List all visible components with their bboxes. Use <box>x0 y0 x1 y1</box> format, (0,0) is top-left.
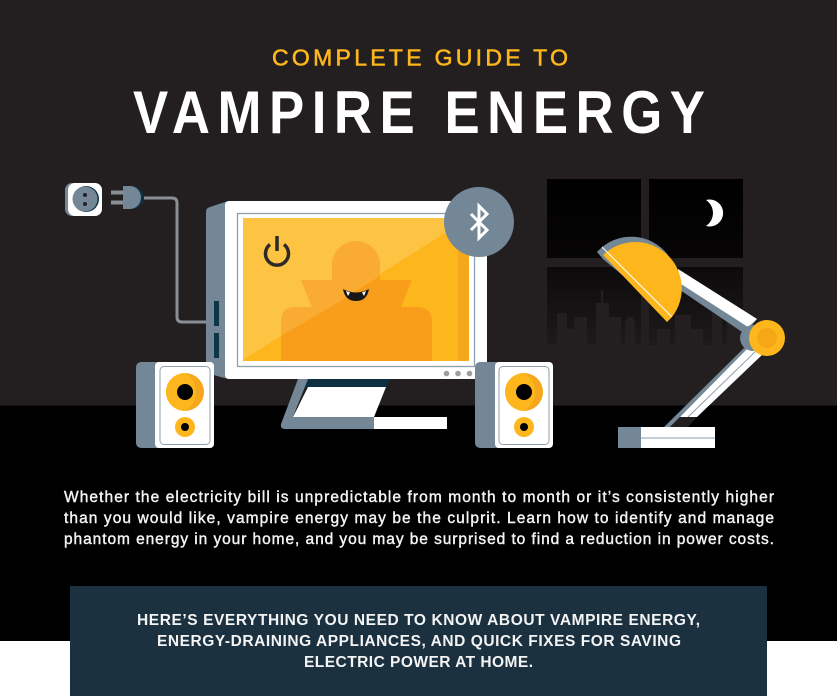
icon: crescent moon <box>706 200 723 226</box>
eyebrow heading: COMPLETE GUIDE TO <box>272 44 568 70</box>
icon: wall outlet <box>65 183 102 216</box>
monitor screen <box>243 218 469 361</box>
monitor side panel <box>206 201 228 379</box>
panel: summary callout <box>70 586 767 696</box>
intro text block: phantom energy in your home, and you may be surprised to find a reduction in power costs. <box>64 531 774 548</box>
desk lamp <box>597 237 785 448</box>
callout text: ENERGY-DRAINING APPLIANCES, AND QUICK FIXES FOR SAVING <box>157 633 681 650</box>
lamp base <box>618 427 715 448</box>
lamp shade <box>597 237 682 322</box>
left speaker <box>136 362 214 448</box>
callout text: ELECTRIC POWER AT HOME. <box>304 654 533 671</box>
callout text: HERE’S EVERYTHING YOU NEED TO KNOW ABOUT VAMPIRE ENERGY, <box>137 612 700 629</box>
monitor bezel <box>225 201 487 379</box>
icon: plug and cable <box>111 186 207 322</box>
callout text <box>137 612 700 671</box>
title <box>133 44 705 146</box>
intro text block: Whether the electricity bill is unpredictable from month to month or it’s consistently higher <box>64 489 774 506</box>
intro text block: than you would like, vampire energy may be the culprit. Learn how to identify and manage <box>64 510 774 527</box>
vampire lit area <box>281 241 380 336</box>
vampire mouth <box>343 289 369 301</box>
window with night skyline <box>547 179 743 345</box>
intro text block <box>64 489 774 548</box>
icon: bluetooth badge <box>444 187 514 257</box>
lamp joint <box>740 320 785 356</box>
monitor <box>206 201 487 429</box>
main heading: VAMPIRE ENERGY <box>133 79 705 146</box>
lamp upper arm <box>678 269 757 334</box>
right speaker <box>475 362 553 448</box>
lamp lower arm <box>664 346 763 427</box>
vampire silhouette <box>281 241 432 361</box>
status dots <box>444 371 472 376</box>
monitor stand <box>281 379 447 429</box>
icon: power symbol <box>266 236 288 265</box>
